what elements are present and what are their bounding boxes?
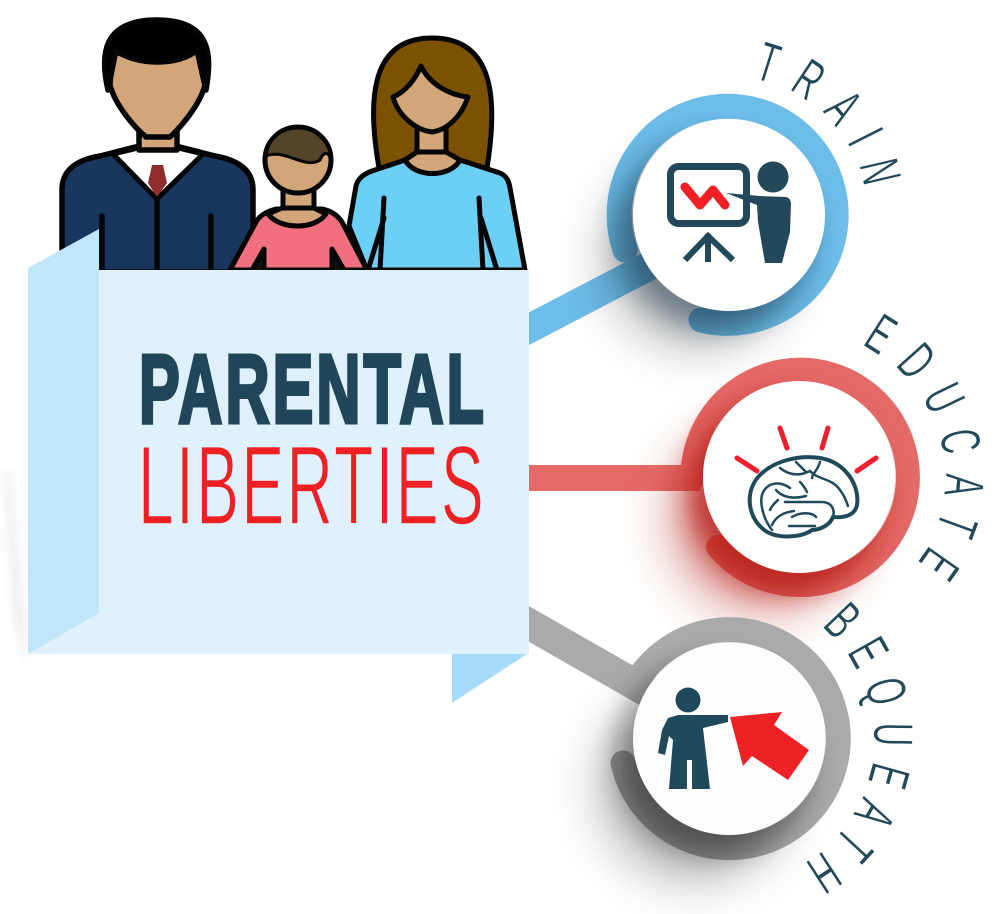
educate ring <box>692 370 908 585</box>
educate disc <box>703 381 895 573</box>
educate connector <box>515 465 700 491</box>
bequeath shadow <box>598 660 811 882</box>
panel body <box>28 270 529 654</box>
educate shadow <box>668 397 883 614</box>
label: educate: EDUCATE <box>864 314 984 582</box>
icon: presenter at board <box>670 162 791 263</box>
bequeath branch <box>529 601 912 906</box>
train connector <box>515 263 655 336</box>
child figure <box>230 127 367 270</box>
bequeath ring <box>623 630 838 848</box>
train ring <box>619 106 836 323</box>
lower ribbon fold <box>452 654 527 703</box>
bequeath disc <box>633 643 825 835</box>
label: train: TRAIN <box>761 42 901 185</box>
title panel <box>28 229 529 703</box>
train branch <box>529 42 901 372</box>
woman figure <box>349 38 525 270</box>
educate branch <box>529 314 984 640</box>
icon: person pointing at arrow <box>658 688 809 789</box>
train shadow <box>604 136 812 348</box>
bequeath connector <box>515 616 655 696</box>
heading: liberties: LIBERTIES <box>138 423 486 548</box>
heading: parental: PARENTAL <box>139 334 487 444</box>
icon: brain <box>737 428 876 537</box>
train disc <box>633 119 825 311</box>
panel shadow <box>4 470 28 668</box>
man figure <box>62 20 253 272</box>
left ribbon fold <box>28 229 99 654</box>
